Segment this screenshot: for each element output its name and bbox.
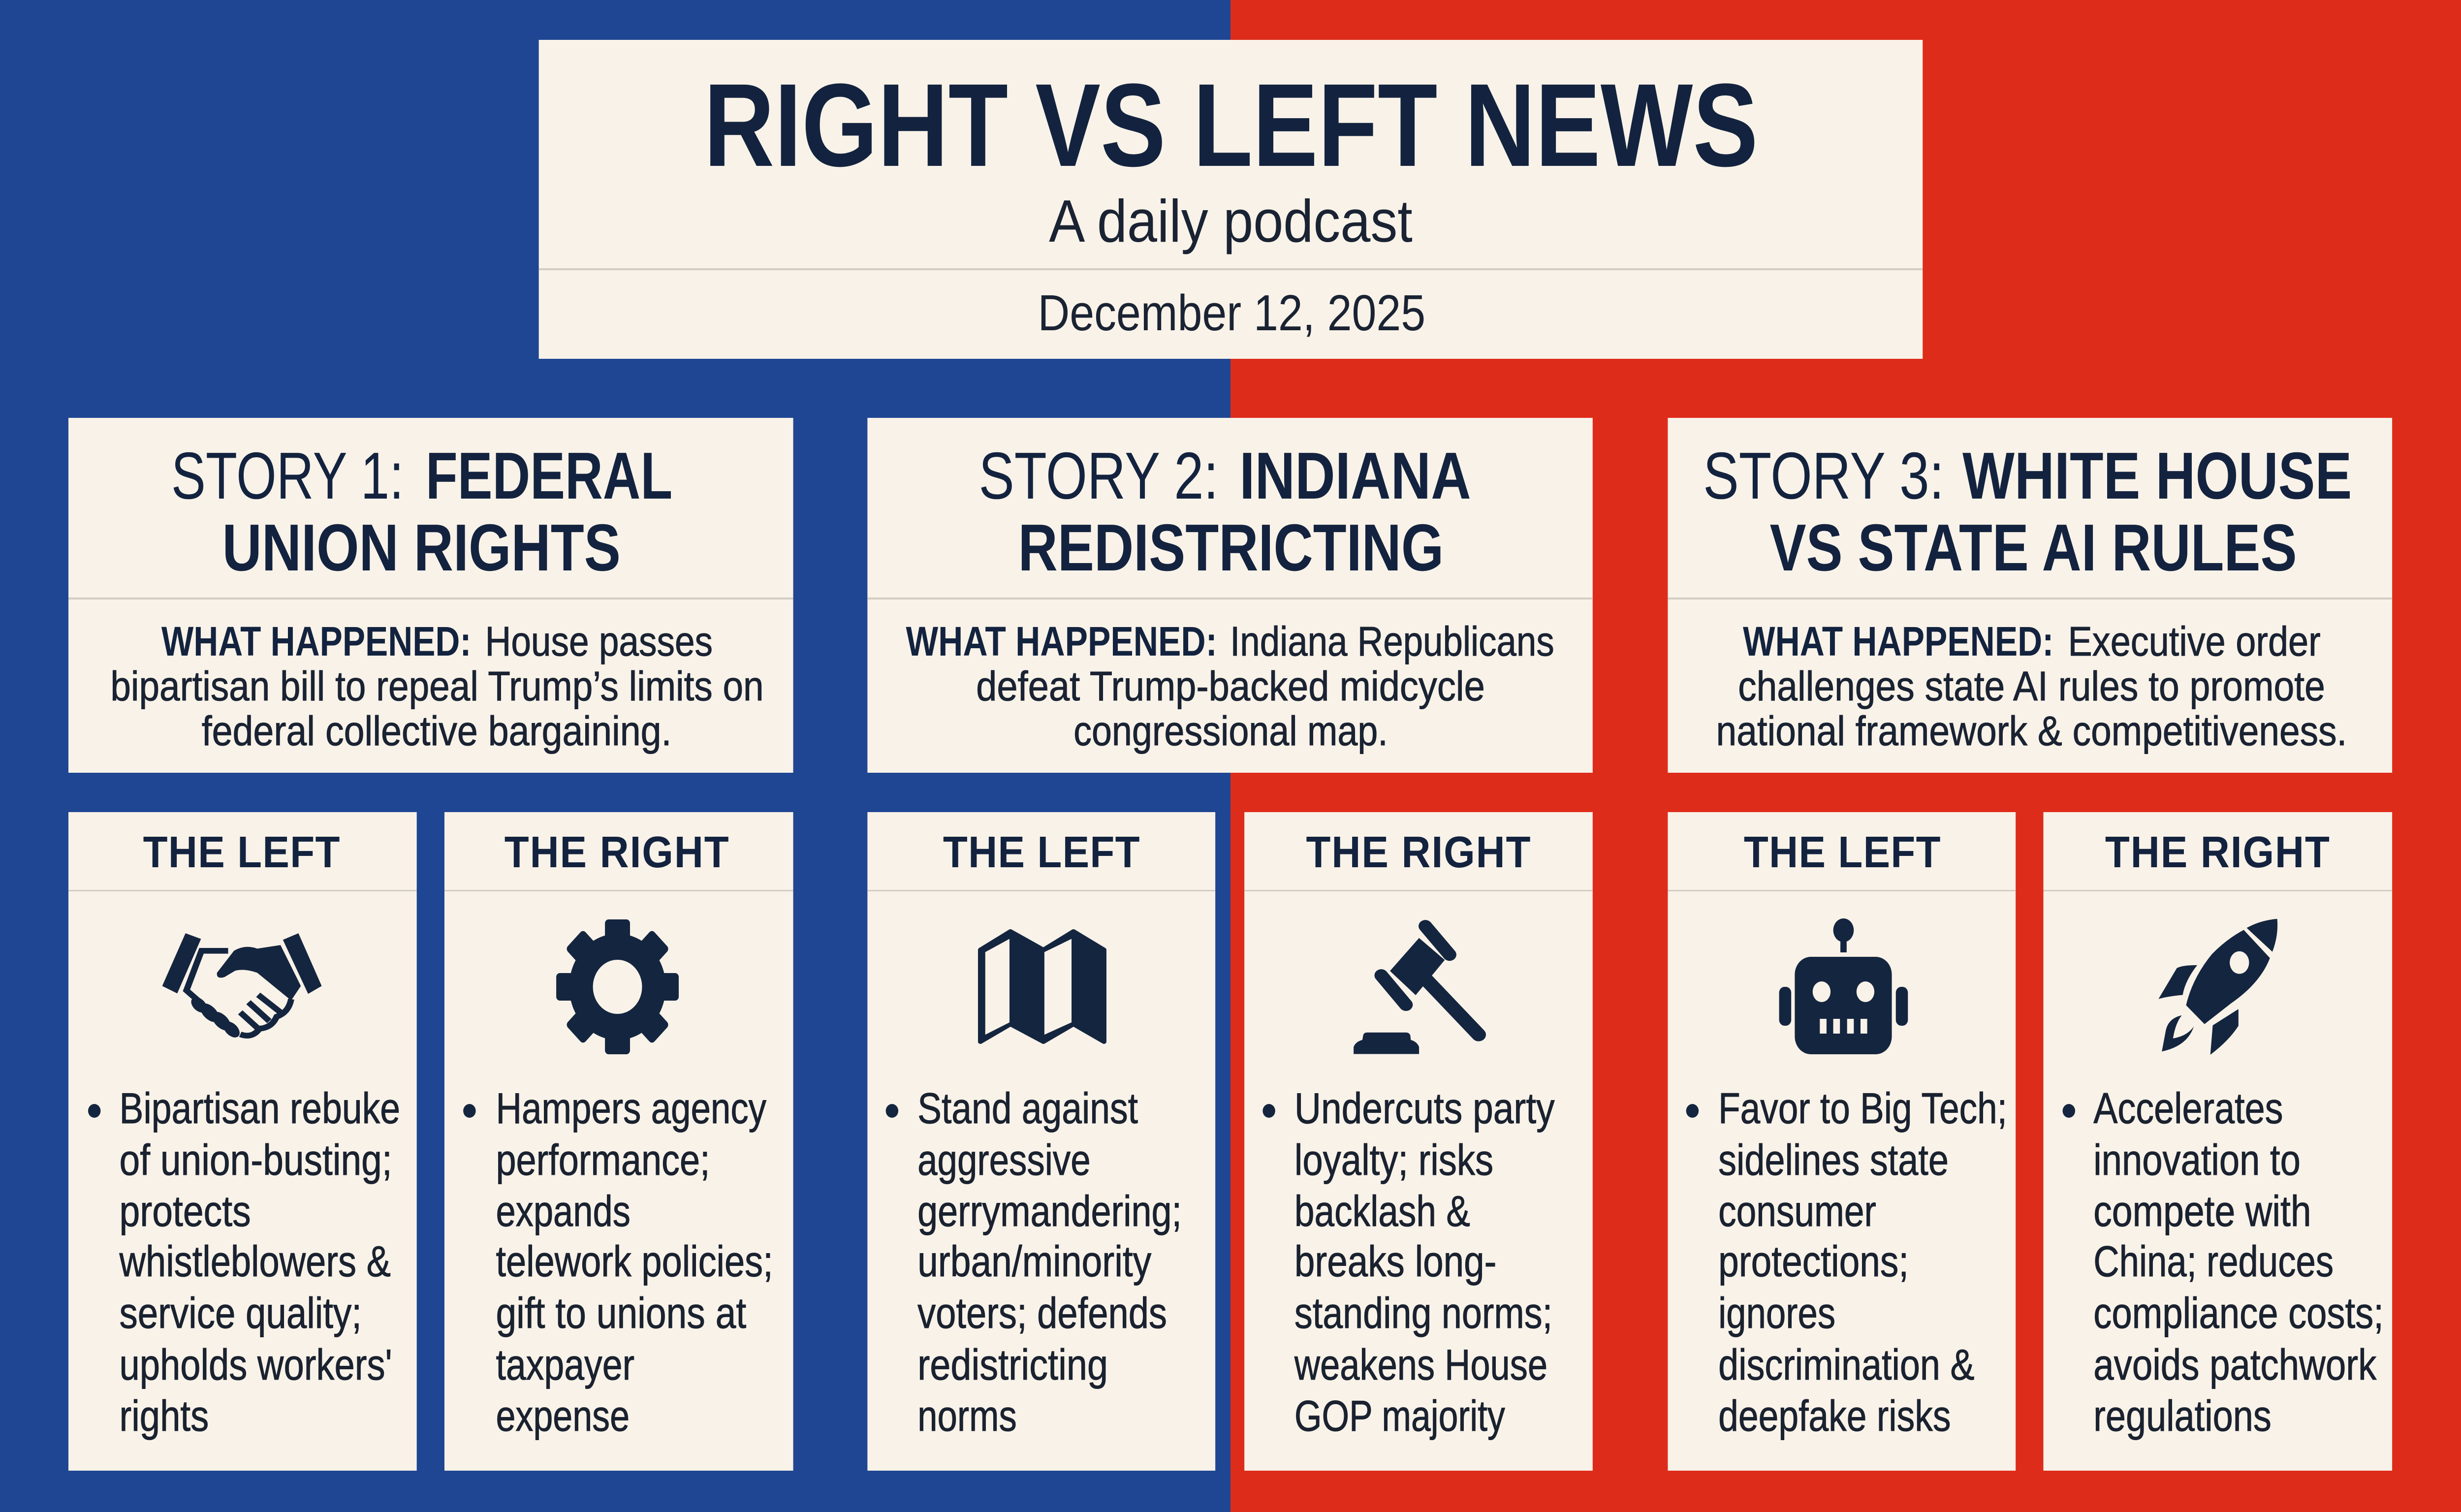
bullet list: expands — [496, 1187, 631, 1235]
bullet list: ignores — [1718, 1289, 1835, 1337]
panel: story 1 header — [68, 418, 793, 773]
text: what happened story 1: WHAT HAPPENED: — [161, 619, 471, 665]
bullet list: urban/minority — [917, 1237, 1151, 1286]
icon: robot — [1779, 918, 1908, 1054]
bullet list: Accelerates — [2093, 1084, 2283, 1133]
text: what happened story 2: Indiana Republicans — [1230, 619, 1554, 665]
bullet list: compliance costs; — [2093, 1289, 2384, 1337]
heading: story 1: UNION RIGHTS — [222, 511, 621, 585]
bullet list: deepfake risks — [1718, 1391, 1951, 1440]
background: red half — [1230, 0, 2461, 1512]
heading: story 2: STORY 2: — [979, 439, 1218, 513]
text: what happened story 1: House passes — [485, 619, 713, 665]
text: what happened story 3: Executive order — [2068, 619, 2321, 665]
bullet list: norms — [917, 1391, 1017, 1440]
panel: story 3 the right — [2044, 812, 2392, 1471]
panel: story 3 header — [1668, 418, 2392, 773]
bullet list: consumer — [1718, 1187, 1876, 1235]
bullet list: taxpayer — [496, 1340, 634, 1389]
heading: story 2 — [979, 439, 1471, 585]
heading: the left: THE LEFT — [1744, 827, 1941, 877]
bullet list: upholds workers' — [120, 1340, 392, 1389]
bullet list: regulations — [2093, 1391, 2272, 1440]
bullet list — [88, 1084, 400, 1440]
bullet list: Bipartisan rebuke — [120, 1084, 400, 1133]
bullet list: innovation to — [2093, 1135, 2301, 1184]
text: what happened story 3: WHAT HAPPENED: — [1743, 619, 2053, 665]
date: December 12, 2025 — [1038, 284, 1425, 341]
text: what happened story 1: bipartisan bill to repeal Trump’s limits on — [110, 663, 764, 710]
bullet list: gift to unions at — [496, 1289, 746, 1337]
background: blue half — [0, 0, 1230, 1512]
bullet list — [1262, 1084, 1555, 1440]
heading: story 3 — [1703, 439, 2352, 585]
text: what happened story 3 — [1716, 619, 2347, 755]
bullet list: Undercuts party — [1294, 1084, 1555, 1133]
title panel — [539, 40, 1923, 359]
bullet list: expense — [496, 1391, 630, 1440]
heading: the right: THE RIGHT — [1306, 827, 1531, 877]
bullet list: of union-busting; — [120, 1135, 392, 1184]
bullet list: performance; — [496, 1135, 710, 1184]
subtitle: A daily podcast — [1049, 187, 1413, 254]
heading: story 1 — [171, 439, 672, 585]
text: what happened story 3: national framework & competitiveness. — [1716, 708, 2347, 755]
text: what happened story 2 — [906, 619, 1554, 755]
text: what happened story 3: challenges state AI rules to promote — [1738, 663, 2325, 710]
bullet list: standing norms; — [1294, 1289, 1552, 1337]
panel: story 2 the right — [1244, 812, 1593, 1471]
bullet list: aggressive — [917, 1135, 1091, 1184]
heading: story 1: STORY 1: — [171, 439, 404, 513]
bullet list: voters; defends — [917, 1289, 1167, 1337]
bullet list: service quality; — [120, 1289, 362, 1337]
bullet list — [2063, 1084, 2384, 1440]
panel: story 1 the right — [444, 812, 793, 1471]
bullet list: weakens House — [1294, 1340, 1547, 1389]
panel: story 2 the left — [867, 812, 1215, 1471]
bullet list: whistleblowers & — [119, 1237, 391, 1286]
bullet list — [463, 1084, 773, 1440]
bullet list: protects — [120, 1187, 251, 1235]
panel: story 3 the left — [1668, 812, 2016, 1471]
bullet list: backlash & — [1294, 1187, 1470, 1235]
bullet list: rights — [120, 1391, 209, 1440]
bullet list: telework policies; — [496, 1237, 773, 1286]
heading: the left: THE LEFT — [143, 827, 340, 877]
icon: gear — [556, 919, 679, 1054]
heading: the right: THE RIGHT — [505, 827, 729, 877]
heading: story 2: REDISTRICTING — [1018, 511, 1444, 585]
heading: the left: THE LEFT — [943, 827, 1140, 877]
bullet list: discrimination & — [1718, 1340, 1975, 1389]
heading: story 2: INDIANA — [1239, 439, 1471, 513]
bullet list — [886, 1084, 1182, 1440]
bullet list: breaks long- — [1294, 1237, 1497, 1286]
heading: the right: THE RIGHT — [2105, 827, 2330, 877]
bullet list: compete with — [2093, 1187, 2311, 1235]
icon: map — [980, 931, 1104, 1042]
bullet list: avoids patchwork — [2093, 1340, 2377, 1389]
bullet list — [1686, 1084, 2007, 1440]
heading: story 3: VS STATE AI RULES — [1770, 511, 2297, 585]
heading: story 3: WHITE HOUSE — [1962, 439, 2352, 513]
bullet list: Hampers agency — [496, 1084, 766, 1133]
text: what happened story 2: congressional map. — [1073, 708, 1388, 755]
bullet list: gerrymandering; — [917, 1187, 1182, 1235]
bullet list: loyalty; risks — [1294, 1135, 1493, 1184]
bullet list: protections; — [1718, 1237, 1909, 1286]
panel: story 2 header — [867, 418, 1593, 773]
bullet list: redistricting — [917, 1340, 1108, 1389]
text: what happened story 1: federal collective bargaining. — [202, 708, 671, 755]
bullet list: Stand against — [917, 1084, 1138, 1133]
icon: rocket — [2158, 919, 2277, 1055]
bullet list: sidelines state — [1718, 1135, 1949, 1184]
bullet list: GOP majority — [1294, 1391, 1505, 1440]
text: what happened story 2: WHAT HAPPENED: — [906, 619, 1217, 665]
title: RIGHT VS LEFT NEWS — [704, 59, 1758, 191]
panel: story 1 the left — [68, 812, 417, 1471]
icon: gavel — [1354, 926, 1479, 1054]
bullet list: China; reduces — [2093, 1237, 2334, 1286]
heading: story 1: FEDERAL — [426, 439, 672, 513]
bullet list: Favor to Big Tech; — [1718, 1084, 2007, 1133]
heading: story 3: STORY 3: — [1703, 439, 1944, 513]
text: what happened story 2: defeat Trump-backed midcycle — [976, 663, 1485, 710]
icon: handshake — [162, 933, 322, 1040]
text: what happened story 1 — [110, 619, 764, 755]
